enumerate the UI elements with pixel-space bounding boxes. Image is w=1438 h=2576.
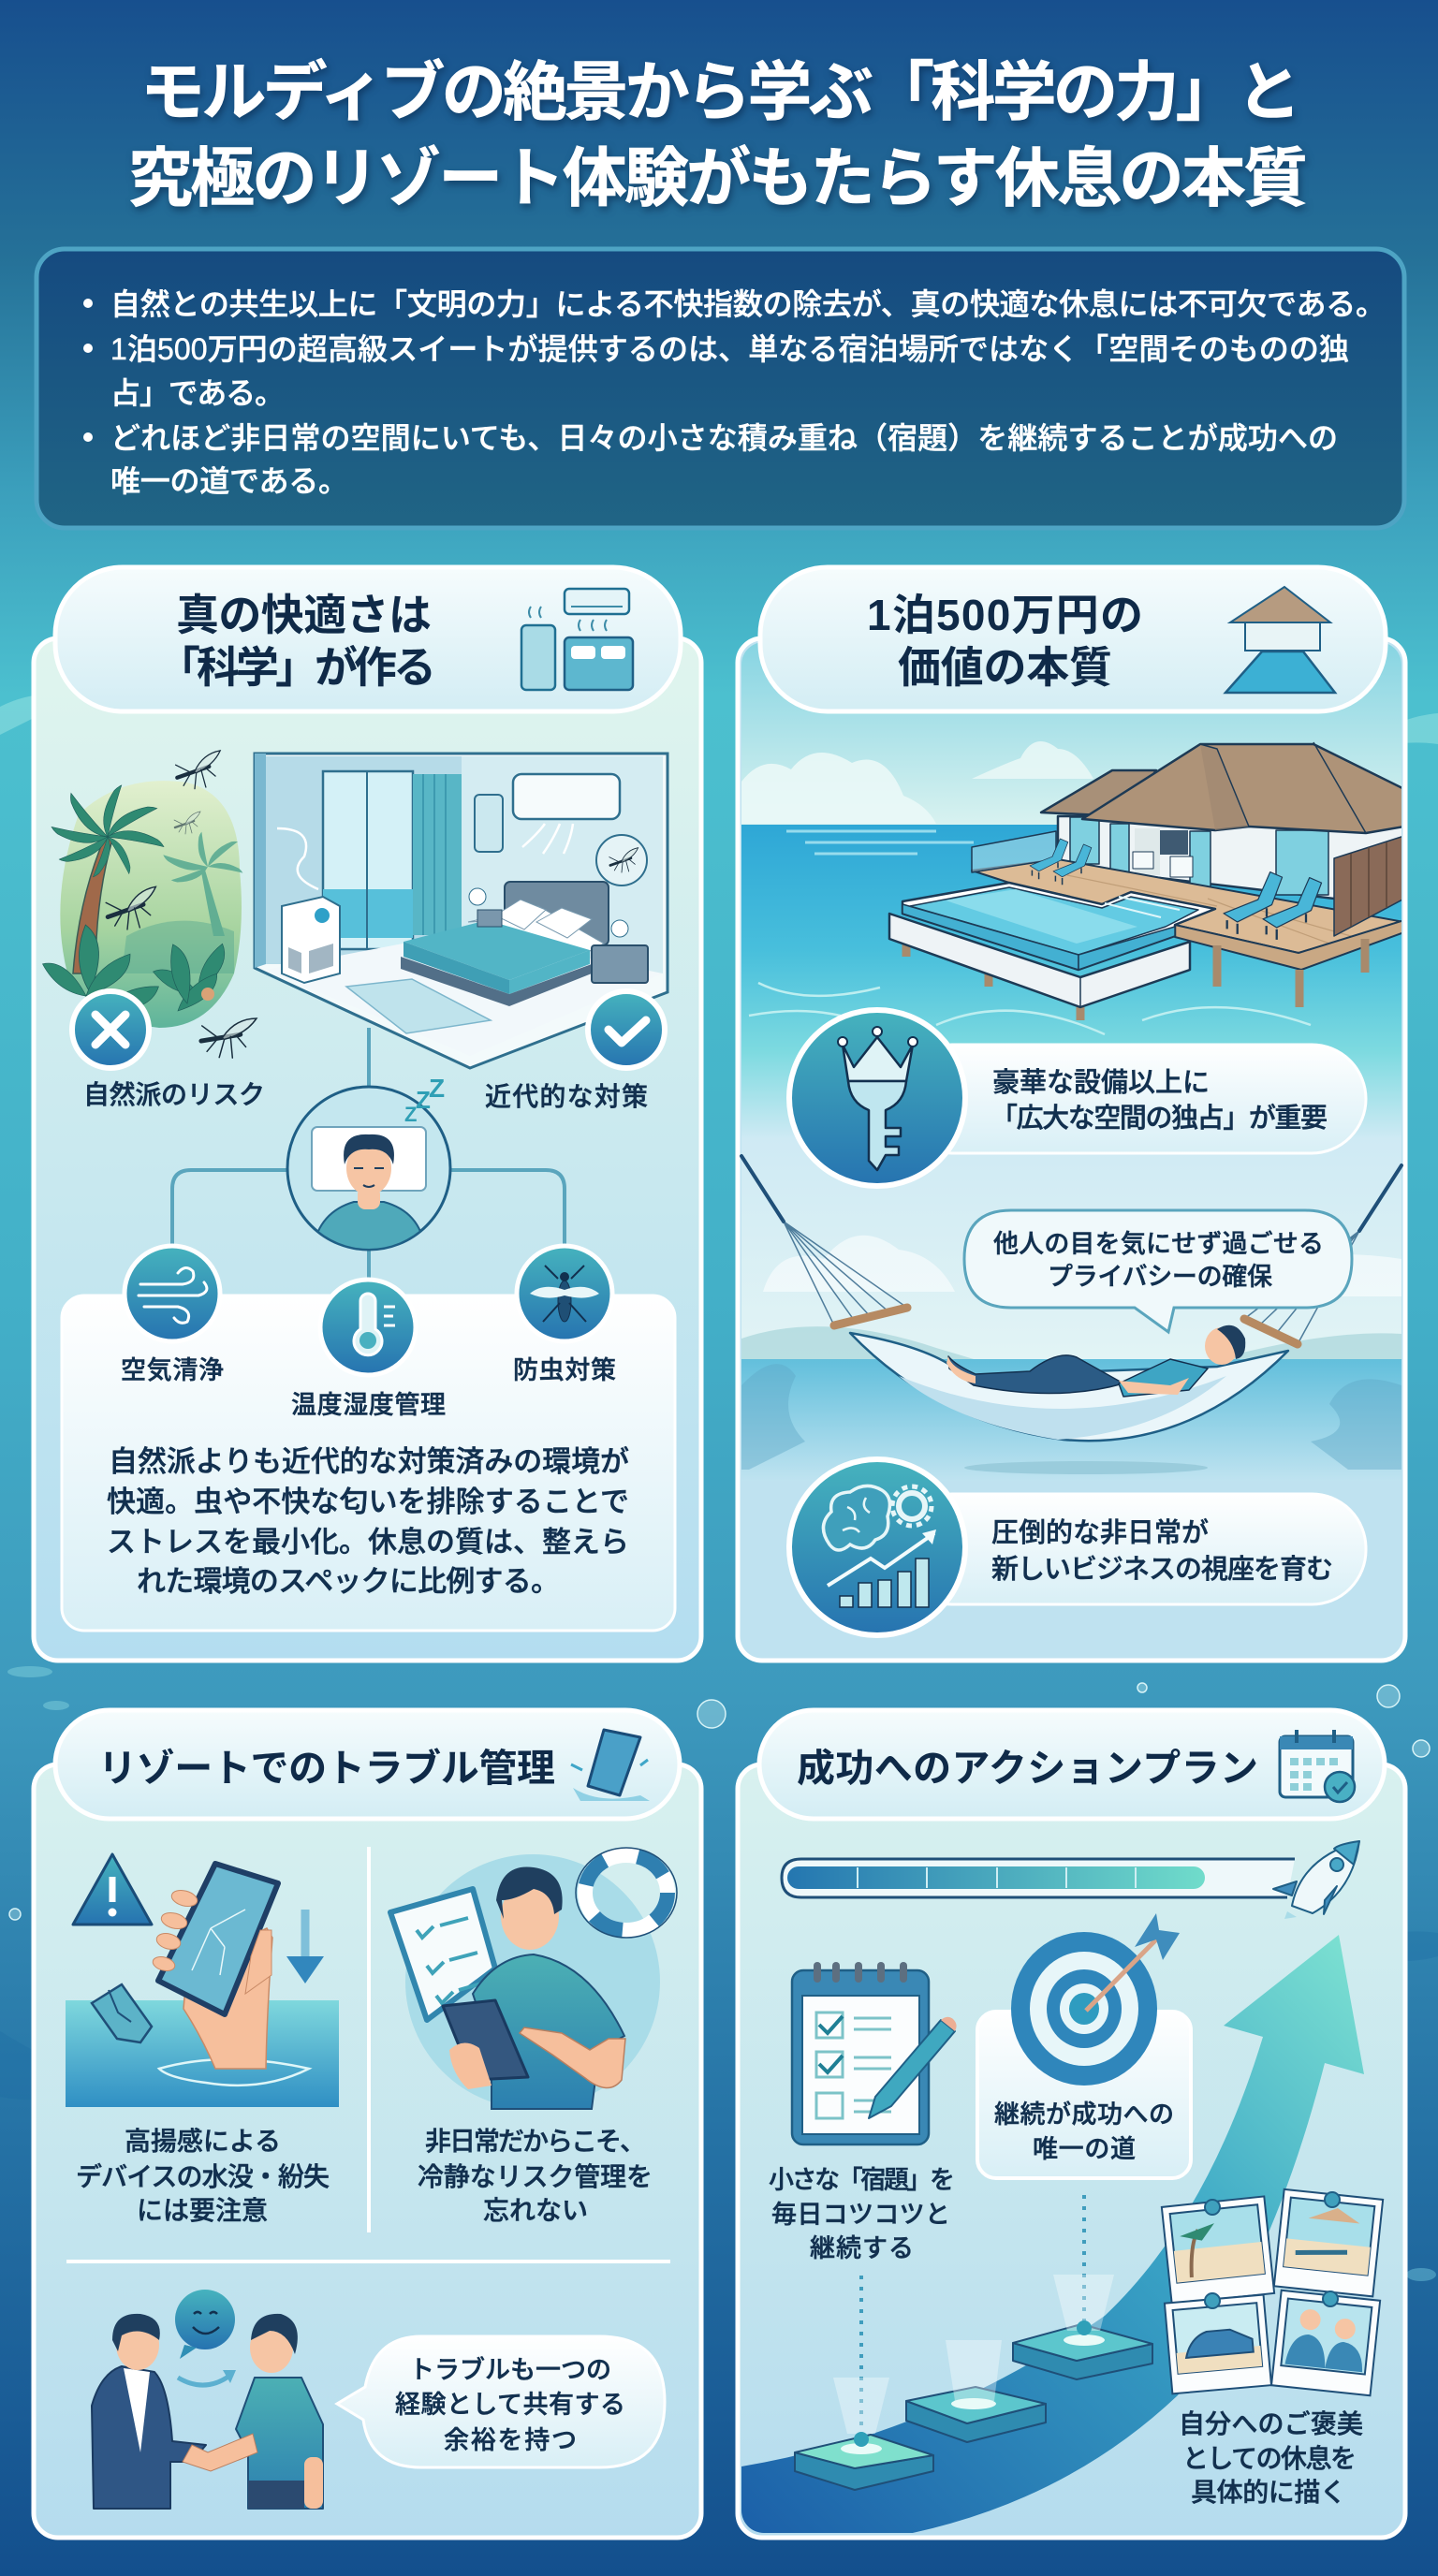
label: nature risk: 自然派のリスク (83, 1080, 265, 1109)
white text card (62, 1295, 675, 1631)
label: insect control: 防虫対策 (513, 1356, 616, 1384)
text: risk management (418, 2127, 653, 2225)
text: risk management: 冷静なリスク管理を (418, 2162, 653, 2191)
text: device loss warning: には要注意 (137, 2196, 268, 2225)
callout: sharing trouble: 余裕を持つ (444, 2426, 577, 2454)
text: risk management: 忘れない (483, 2196, 588, 2225)
text: device loss warning (76, 2127, 330, 2225)
icon group: reward photos (1162, 2189, 1383, 2395)
callout: new perspective (899, 1494, 1366, 1604)
illustration: jungle with mosquitoes (43, 751, 257, 1062)
chart: big rising arrow (741, 1935, 1364, 2539)
panel: summary bullets (37, 249, 1404, 528)
icon: sleeping person: Z (429, 1074, 445, 1103)
icon: lifebuoy (576, 1848, 677, 1938)
icon: air purification (125, 1246, 220, 1341)
callout: sharing trouble (337, 2336, 665, 2467)
heading: science comfort: 「科学」が作る (157, 643, 436, 692)
heading: action plan: 成功へのアクションプラン (797, 1747, 1258, 1790)
illustration: two men shaking hands (92, 2290, 323, 2509)
panel: summary bullets: 自然との共生以上に「文明の力」による不快指数の除去が、真の快適な休息には不可欠である。 (110, 287, 1386, 321)
icon: checklist and pencil (792, 1962, 957, 2144)
callout: exclusive space: 「広大な空間の独占」が重要 (990, 1103, 1328, 1134)
panel: trouble management (34, 1710, 701, 2538)
heading: value (760, 567, 1386, 711)
title: 究極のリゾート体験がもたらす休息の本質 (128, 142, 1308, 214)
panel: value of 5M yen night (738, 567, 1405, 1661)
icon: rocket (1273, 1841, 1359, 1919)
panel: summary bullets: 1泊500万円の超高級スイートが提供するのは、単なる宿泊場所ではなく「空間そのものの独 (110, 332, 1349, 366)
text: small homework: 毎日コツコツと (771, 2201, 950, 2229)
text: device loss warning: 高揚感による (125, 2127, 281, 2156)
icon: sleeping person (287, 1074, 450, 1251)
text: device loss warning: デバイスの水没・紛失 (76, 2162, 330, 2191)
text: reward (1179, 2409, 1363, 2507)
heading: trouble management: リゾートでのトラブル管理 (98, 1747, 555, 1790)
text block: comfort explanation: 快適。虫や不快な匂いを排除することで (107, 1486, 629, 1518)
panel: summary bullets: 占」である。 (110, 376, 285, 410)
panel: science comfort (34, 567, 701, 1661)
label: air: 空気清浄 (121, 1356, 224, 1384)
heading: science comfort: 真の快適さは (176, 591, 432, 639)
heading: value: 1泊500万円の (867, 591, 1143, 639)
card: continuity: 継続が成功への (994, 2100, 1174, 2129)
icon: warning triangle (73, 1854, 152, 1925)
icon: brain and growth (789, 1459, 965, 1635)
card: continuity (977, 1913, 1191, 2178)
callout: privacy bubble: 他人の目を気にせず過ごせる (993, 1230, 1324, 1258)
text: reward: としての休息を (1182, 2444, 1357, 2473)
text: small homework (769, 2166, 955, 2262)
icon: cross badge (72, 991, 149, 1068)
illustration: hammock and person (741, 1156, 1401, 1441)
text block: comfort explanation: 自然派よりも近代的な対策済みの環境が (109, 1445, 629, 1478)
icon: check badge (588, 991, 665, 1068)
icon: sleeping person: Z (404, 1103, 417, 1126)
title: モルディブの絶景から学ぶ「科学の力」と (140, 56, 1301, 128)
callout: new perspective: 圧倒的な非日常が (991, 1517, 1209, 1548)
callout: privacy bubble (964, 1210, 1352, 1332)
scene: hammock background (741, 1138, 1401, 1481)
callout: privacy bubble: プライバシーの確保 (1048, 1263, 1272, 1291)
icon: crown key (789, 1010, 965, 1186)
heading: action plan (759, 1710, 1385, 1819)
illustration: phone falling in water (66, 1864, 339, 2107)
card: continuity: 唯一の道 (1033, 2135, 1136, 2163)
text: risk management: 非日常だからこそ、 (425, 2127, 646, 2156)
title (128, 56, 1308, 214)
scene: ocean and sky (741, 642, 1401, 1139)
illustration: modern bedroom (255, 754, 668, 1068)
illustration: man with checklist (390, 1854, 660, 2109)
icon: sleeping person: Z (416, 1086, 431, 1114)
text: small homework: 小さな「宿題」を (769, 2166, 955, 2194)
heading: value: 価値の本質 (898, 643, 1112, 692)
callout: exclusive space: 豪華な設備以上に (992, 1067, 1210, 1098)
label: modern measures: 近代的な対策 (485, 1082, 648, 1111)
heading: trouble management (55, 1710, 680, 1819)
illustration: overwater villa (889, 742, 1404, 1020)
callout: new perspective: 新しいビジネスの視座を育む (991, 1554, 1333, 1585)
text: reward: 具体的に描く (1191, 2478, 1346, 2507)
heading: science comfort (55, 567, 681, 711)
icon: thermometer (320, 1280, 416, 1375)
text block: comfort explanation: れた環境のスペックに比例する。 (137, 1565, 560, 1598)
steps: three platforms (795, 2275, 1152, 2490)
text: small homework: 継続する (810, 2234, 914, 2262)
icon: insect (517, 1246, 612, 1341)
text: reward: 自分へのご褒美 (1179, 2409, 1363, 2438)
dividers (66, 1847, 670, 2263)
panel: summary bullets: 唯一の道である。 (110, 464, 348, 498)
connector lines (172, 1028, 565, 1292)
callout: sharing trouble: 経験として共有する (395, 2391, 625, 2419)
label: temperature: 温度湿度管理 (291, 1391, 446, 1419)
text block: comfort explanation (107, 1445, 629, 1598)
text block: comfort explanation: ストレスを最小化。休息の質は、整えら (107, 1526, 629, 1559)
callout: exclusive space (899, 1045, 1366, 1153)
dotted guide lines (861, 2195, 1084, 2434)
callout: sharing trouble: トラブルも一つの (409, 2356, 611, 2384)
panel: action plan (738, 1710, 1405, 2539)
panel: summary bullets: どれほど非日常の空間にいても、日々の小さな積み重ね（宿題）を継続することが成功への (110, 421, 1338, 455)
progress bar (782, 1859, 1295, 1897)
